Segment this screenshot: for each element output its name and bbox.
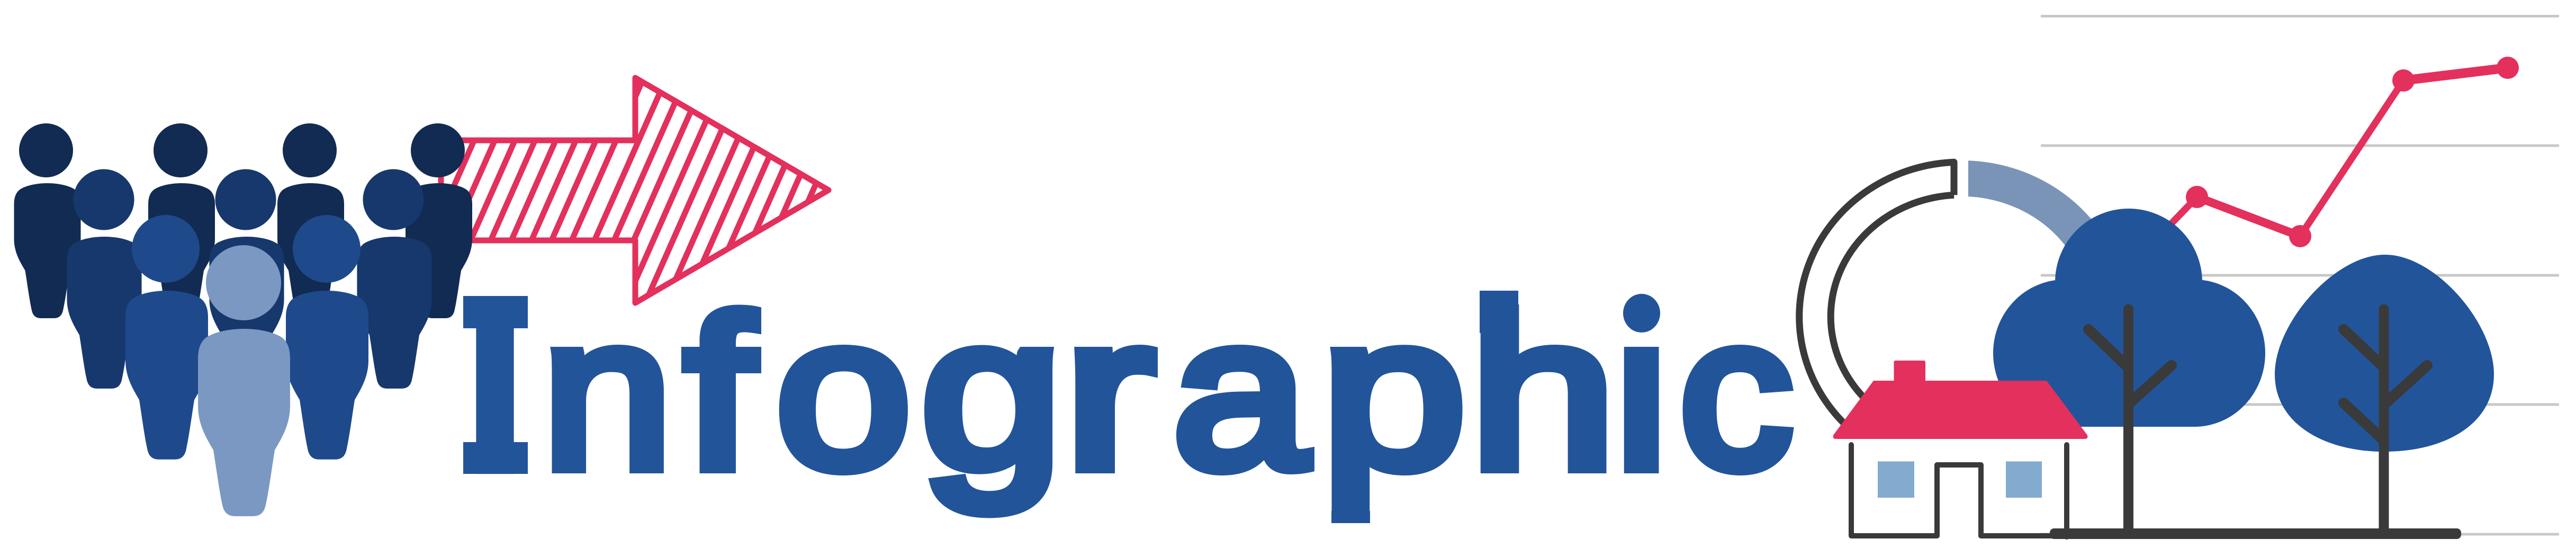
tree trunk and branches bbox=[2344, 309, 2427, 532]
chart grid lines bbox=[2041, 15, 2559, 536]
title: Infographic: a bbox=[1173, 272, 1308, 513]
title: Infographic: c bbox=[1680, 272, 1793, 513]
title: Infographic: i bbox=[1615, 272, 1668, 513]
house bbox=[1833, 361, 2087, 537]
donut: blue segment bbox=[1968, 160, 2112, 271]
tree crown: egg bbox=[2275, 255, 2494, 452]
tree: cloud-shaped bbox=[1993, 209, 2265, 532]
donut: outlined segment bbox=[1799, 162, 1954, 432]
donut chart bbox=[1799, 160, 2112, 432]
front person bbox=[198, 245, 290, 516]
window left bbox=[1878, 462, 1914, 498]
line chart: red trend bbox=[2155, 57, 2519, 247]
ground line bbox=[2050, 528, 2461, 539]
house walls and door outline bbox=[1851, 445, 2067, 537]
title: Infographic: I bbox=[461, 252, 529, 517]
title: Infographic: r bbox=[1064, 272, 1154, 513]
second row of people bbox=[67, 169, 432, 389]
tree crown: three lobes bbox=[1993, 209, 2265, 427]
title: Infographic bbox=[461, 252, 1794, 523]
crowd of people bbox=[14, 123, 472, 516]
tree: egg-shaped bbox=[2275, 255, 2494, 532]
title: Infographic: h bbox=[1470, 272, 1616, 513]
title: Infographic: f bbox=[685, 272, 754, 513]
title: Infographic: n bbox=[543, 272, 672, 513]
third row of people bbox=[125, 215, 368, 460]
title: Infographic: g bbox=[921, 272, 1062, 513]
title: Infographic: p bbox=[1322, 272, 1466, 513]
roof and chimney bbox=[1833, 361, 2087, 439]
back row of people bbox=[14, 123, 472, 318]
title: Infographic: o bbox=[776, 272, 911, 513]
arrow: hatched red pointing right bbox=[438, 75, 831, 306]
tree trunk and branches bbox=[2088, 309, 2172, 532]
window right bbox=[2006, 462, 2042, 498]
